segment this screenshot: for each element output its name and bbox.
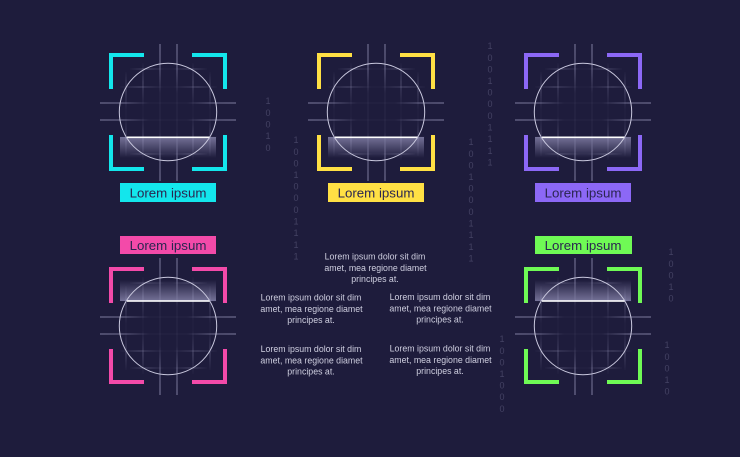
binary column 3: 0 — [468, 160, 474, 170]
label — [535, 183, 631, 202]
binary column 3: 1 — [468, 230, 474, 240]
scan line — [335, 136, 418, 138]
binary column 1: 0 — [265, 108, 271, 118]
binary column 3: 0 — [468, 149, 474, 159]
binary column 3: 1 — [468, 172, 474, 182]
label: Lorem ipsum — [545, 238, 621, 253]
text block: middle left: principes at. — [287, 315, 335, 325]
binary column 4: 0 — [487, 111, 493, 121]
binary column 2: 0 — [293, 193, 299, 203]
binary column 7: 1 — [664, 375, 670, 385]
panel: pink scanner — [100, 236, 236, 395]
binary column 5: 1 — [499, 334, 505, 344]
binary column 7: 0 — [664, 364, 670, 374]
panel: purple scanner — [515, 44, 651, 202]
binary column 5: 0 — [499, 358, 505, 368]
binary column 5: 0 — [499, 392, 505, 402]
label: Lorem ipsum — [130, 238, 206, 253]
binary column 3: 1 — [468, 137, 474, 147]
binary column 3: 1 — [468, 254, 474, 264]
scan band — [120, 280, 216, 301]
text block: top centre: principes at. — [351, 274, 399, 284]
text block: middle left: Lorem ipsum dolor sit dim — [261, 292, 361, 302]
label: Lorem ipsum — [130, 186, 206, 200]
corner brackets — [319, 55, 433, 169]
binary column 2: 0 — [293, 158, 299, 168]
target circle — [534, 63, 632, 161]
binary column 3: 0 — [468, 184, 474, 194]
scan band — [535, 280, 631, 301]
binary column 7: 0 — [664, 352, 670, 362]
scanner grid — [100, 258, 236, 395]
scanner grid — [308, 44, 444, 181]
text block: middle left: amet, mea regione diamet — [260, 304, 363, 314]
binary column 6: 0 — [668, 270, 674, 280]
binary column 4: 1 — [487, 134, 493, 144]
target circle — [119, 63, 217, 161]
binary column 4: 1 — [487, 41, 493, 51]
binary column 6: 1 — [668, 282, 674, 292]
text block: bottom right: Lorem ipsum dolor sit dim — [390, 344, 490, 354]
binary column 3: 1 — [468, 242, 474, 252]
binary column 7: 1 — [664, 340, 670, 350]
label: Lorem ipsum — [338, 186, 414, 200]
corner brackets — [111, 55, 225, 169]
binary column 5: 0 — [499, 380, 505, 390]
text block: bottom left: principes at. — [287, 366, 335, 376]
binary column 4: 0 — [487, 64, 493, 74]
scanner grid — [515, 44, 651, 181]
scanner grid — [100, 44, 236, 181]
text block: bottom right: amet, mea regione diamet — [389, 355, 492, 365]
corner brackets — [526, 269, 640, 382]
text block: top centre: amet, mea regione diamet — [324, 263, 427, 273]
binary column 2: 1 — [293, 252, 299, 262]
binary column 5: 0 — [499, 346, 505, 356]
binary column 2: 1 — [293, 228, 299, 238]
corner brackets — [111, 269, 225, 382]
binary column 1: 0 — [265, 120, 271, 130]
text block: bottom left: amet, mea regione diamet — [260, 356, 363, 366]
binary column 2: 0 — [293, 147, 299, 157]
text block: top centre: Lorem ipsum dolor sit dim — [325, 252, 425, 262]
binary column 1: 1 — [265, 131, 271, 141]
binary column 5: 0 — [499, 404, 505, 414]
binary column 2: 0 — [293, 182, 299, 192]
binary column 4: 0 — [487, 53, 493, 63]
label — [120, 183, 216, 202]
target circle — [119, 277, 217, 375]
text block: middle right: Lorem ipsum dolor sit dim — [390, 292, 490, 302]
text block: bottom right: principes at. — [416, 366, 464, 376]
scan line — [542, 300, 625, 302]
binary column 4: 1 — [487, 158, 493, 168]
binary column 3: 0 — [468, 207, 474, 217]
text block: middle right: principes at. — [416, 314, 464, 324]
text block: bottom left: Lorem ipsum dolor sit dim — [261, 344, 361, 354]
label — [535, 236, 632, 254]
scan band — [328, 137, 424, 158]
binary column 4: 0 — [487, 99, 493, 109]
panel: cyan scanner — [100, 44, 236, 202]
binary column 7: 0 — [664, 386, 670, 396]
binary column 3: 1 — [468, 218, 474, 228]
label: Lorem ipsum — [545, 186, 621, 200]
scan line — [542, 136, 625, 138]
binary column 4: 1 — [487, 76, 493, 86]
label — [120, 236, 216, 254]
scanner grid — [515, 258, 651, 395]
text block: middle right: amet, mea regione diamet — [389, 304, 492, 314]
binary column 2: 1 — [293, 170, 299, 180]
binary column 2: 0 — [293, 205, 299, 215]
binary column 2: 1 — [293, 135, 299, 145]
binary column 4: 0 — [487, 88, 493, 98]
binary column 1: 0 — [265, 143, 271, 153]
binary column 4: 1 — [487, 146, 493, 156]
binary column 6: 0 — [668, 259, 674, 269]
binary column 6: 1 — [668, 247, 674, 257]
label — [328, 183, 424, 202]
scan band — [535, 137, 631, 158]
binary column 5: 1 — [499, 369, 505, 379]
target circle — [327, 63, 425, 161]
panel: green scanner — [515, 236, 651, 395]
scan band — [120, 137, 216, 158]
binary column 1: 1 — [265, 96, 271, 106]
binary column 3: 0 — [468, 195, 474, 205]
binary column 2: 1 — [293, 216, 299, 226]
binary column 6: 0 — [668, 294, 674, 304]
binary column 2: 1 — [293, 240, 299, 250]
binary column 4: 1 — [487, 122, 493, 132]
corner brackets — [526, 55, 640, 169]
panel: yellow scanner — [308, 44, 444, 202]
scan line — [127, 136, 210, 138]
target circle — [534, 277, 632, 375]
scan line — [127, 300, 210, 302]
